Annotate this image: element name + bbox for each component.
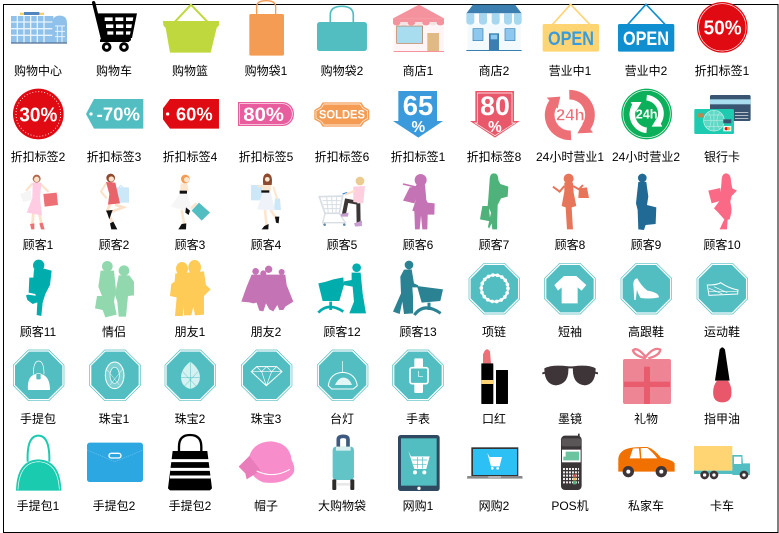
label: 台灯 <box>330 411 354 426</box>
label: 营业中1 <box>549 63 592 78</box>
label: POS机 <box>551 499 589 513</box>
icon: customer 10 silhouette <box>708 173 737 229</box>
icon: discount arrow 80: % <box>488 119 502 136</box>
label: 朋友2 <box>251 325 282 339</box>
label: 顾客5 <box>327 237 358 252</box>
label: 商店2 <box>479 63 510 78</box>
label: 珠宝3 <box>251 412 282 426</box>
label: 手提包2 <box>93 498 136 513</box>
icon: clutch <box>87 443 143 482</box>
icon: discount arrow 65: 65 <box>403 90 433 121</box>
icon: customer 8 silhouette <box>553 174 589 229</box>
icon: customer 13 silhouette <box>393 261 443 315</box>
label: 购物袋2 <box>321 63 364 78</box>
label: 网购1 <box>403 498 434 513</box>
icon: lipstick <box>481 349 508 404</box>
icon: large shopping trolley bag <box>332 436 354 490</box>
icon: discount tag soldes: SOLDES <box>319 108 365 122</box>
icon: open sign 1: OPEN <box>548 29 594 50</box>
label: 购物中心 <box>14 63 62 78</box>
icon: open sign 1 <box>543 4 599 52</box>
label: 顾客10 <box>703 237 741 252</box>
label: 顾客6 <box>403 237 434 252</box>
icon: discount tag 70% <box>86 99 143 129</box>
icon: customer 2 <box>101 174 129 229</box>
icon: discount tag 60% <box>163 99 219 129</box>
icon: discount arrow 80 <box>470 91 520 138</box>
icon: striped bag <box>168 435 212 490</box>
icon: discount tag soldes <box>314 102 369 127</box>
label: 顾客7 <box>479 237 510 252</box>
label: 顾客11 <box>20 324 57 339</box>
label: 顾客9 <box>631 237 662 252</box>
icon: discount tag 50%: 50% <box>704 17 742 39</box>
label: 折扣标签1 <box>695 63 750 78</box>
icon: sunglasses <box>542 366 598 385</box>
icon: customer 9 silhouette <box>636 174 656 230</box>
icon: friends 1 silhouette <box>170 260 211 316</box>
label: 短袖 <box>558 324 582 339</box>
label: 网购2 <box>479 498 510 513</box>
label: 口红 <box>482 411 506 426</box>
icon: shopping basket <box>163 5 219 53</box>
label: 购物车 <box>96 63 132 78</box>
label: 顾客13 <box>399 324 437 339</box>
label: 珠宝1 <box>99 412 130 426</box>
label: 运动鞋 <box>704 324 740 339</box>
icon: 24 hour 1: 24h <box>556 106 585 125</box>
label: 手提包1 <box>17 498 60 513</box>
label: 折扣标签1 <box>391 149 446 164</box>
label: 帽子 <box>254 498 278 513</box>
icon: discount tag 70%: -70% <box>97 104 140 125</box>
icon: customer 12 silhouette <box>318 263 366 313</box>
icon: customer 1 <box>20 175 58 229</box>
label: 24小时营业2 <box>612 150 680 164</box>
icon: open sign 2: OPEN <box>623 29 669 50</box>
icon: high heel <box>621 263 672 314</box>
label: 卡车 <box>710 498 734 513</box>
icon: online shopping laptop <box>467 447 523 479</box>
icon: couple silhouette <box>95 261 134 317</box>
icon: friends 2 silhouette <box>241 266 293 311</box>
icon: lamp <box>317 350 368 401</box>
label: 情侣 <box>102 324 126 339</box>
label: 手表 <box>406 412 430 426</box>
icon: discount tag 80%: 80% <box>243 105 284 126</box>
icon: customer 3 <box>171 175 210 229</box>
icon: discount arrow 65: % <box>412 119 426 136</box>
icon: hat <box>239 441 294 483</box>
label: 顾客1 <box>23 237 54 252</box>
icon: shopping bag 2 <box>317 6 367 51</box>
label: 顾客8 <box>555 237 586 252</box>
icon: customer 7 silhouette <box>480 173 508 229</box>
icon: customer 6 silhouette <box>403 174 435 229</box>
icon: shopping bag 1 <box>249 1 284 56</box>
icon: discount arrow 80: 80 <box>480 91 510 121</box>
icon: truck <box>694 446 750 479</box>
label: 大购物袋 <box>318 498 366 513</box>
icon: watch <box>393 350 443 401</box>
icon: online shopping tablet <box>398 435 440 491</box>
icon: gift box <box>623 349 671 404</box>
icon: discount tag 60%: 60% <box>176 104 213 125</box>
icon: nail polish <box>713 347 731 402</box>
label: 商店1 <box>403 63 434 78</box>
label: 高跟鞋 <box>628 324 664 339</box>
icon: customer 11 silhouette <box>26 260 52 316</box>
icon: customer 4 <box>251 173 281 229</box>
label: 营业中2 <box>625 63 668 78</box>
label: 顾客2 <box>99 237 130 252</box>
icon: shop 2 <box>466 5 522 51</box>
icon: jewel 3 diamond <box>241 350 292 401</box>
label: 墨镜 <box>558 411 582 426</box>
icon: 24 hour 2 <box>621 89 672 139</box>
icon: shop 1 <box>393 5 444 52</box>
label: 购物袋1 <box>245 63 288 78</box>
label: 折扣标签2 <box>11 149 66 164</box>
label: 朋友1 <box>175 325 206 339</box>
icon: necklace <box>469 263 520 314</box>
label: 折扣标签6 <box>315 149 370 164</box>
label: 手提包 <box>20 411 56 426</box>
icon: jewel 1 <box>90 350 140 401</box>
label: 折扣标签5 <box>239 149 294 164</box>
label: 私家车 <box>628 498 664 513</box>
icon: discount tag 80% <box>238 102 294 126</box>
icon: open sign 2 <box>618 4 674 52</box>
icon: handbag 1 <box>16 436 61 491</box>
icon: 24 hour 1 <box>547 95 593 135</box>
label: 折扣标签3 <box>87 149 142 164</box>
icon: discount tag 30% <box>13 89 64 139</box>
icon: sneaker <box>697 263 748 314</box>
icon: jewel 2 <box>165 350 216 401</box>
icon: private car <box>618 447 675 477</box>
label: 顾客3 <box>175 237 206 252</box>
icon: t-shirt <box>545 263 595 314</box>
icon: shopping cart <box>94 3 137 50</box>
label: 珠宝2 <box>175 412 206 426</box>
icon: shopping mall <box>11 12 67 43</box>
icon: customer 5 <box>319 177 365 227</box>
label: 手提包2 <box>169 498 212 513</box>
label: 购物篮 <box>172 63 208 78</box>
icon: POS terminal <box>561 434 582 490</box>
icon: bank card <box>694 95 751 134</box>
icon: 24 hour 2: 24h <box>636 108 658 122</box>
label: 顾客4 <box>251 237 282 252</box>
label: 折扣标签8 <box>467 149 522 164</box>
icon: discount arrow 65 <box>393 90 443 138</box>
label: 24小时营业1 <box>536 150 604 164</box>
label: 礼物 <box>634 411 658 426</box>
label: 项链 <box>482 324 506 339</box>
label: 折扣标签4 <box>163 149 218 164</box>
label: 银行卡 <box>704 150 740 164</box>
label: 顾客12 <box>323 324 361 339</box>
icon: discount tag 50% <box>697 2 748 53</box>
label: 指甲油 <box>704 411 740 426</box>
icon: handbag in octagon <box>13 350 64 401</box>
icon: discount tag 30%: 30% <box>19 104 58 126</box>
